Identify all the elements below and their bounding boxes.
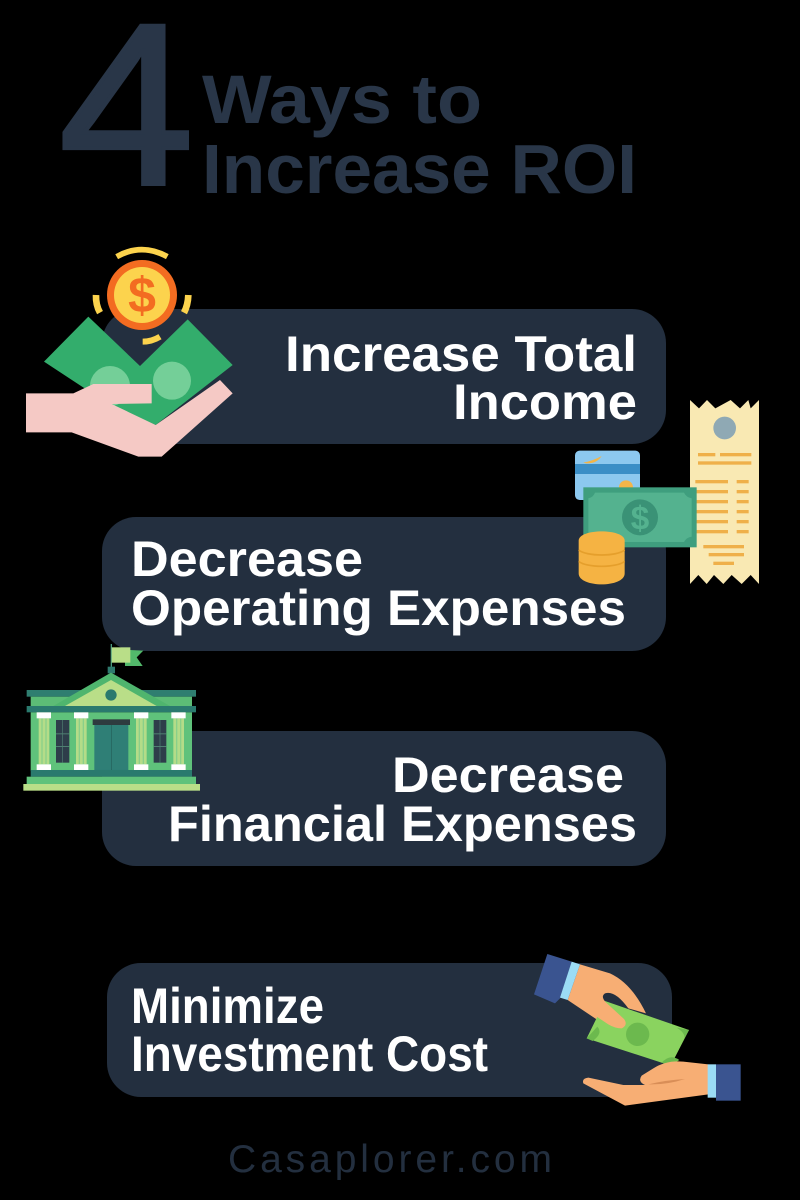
panel: minimize investment cost xyxy=(107,963,672,1097)
panel: increase total income xyxy=(102,309,666,444)
text: Decrease Operating Expenses: Decrease xyxy=(131,531,363,587)
panel: decrease financial expenses xyxy=(102,731,666,866)
text: Decrease Operating Expenses: Operating Expenses xyxy=(131,580,626,636)
panel: decrease operating expenses xyxy=(102,517,666,651)
text: Minimize Investment Cost xyxy=(131,978,488,1082)
title line: Increase ROI: Increase ROI xyxy=(202,130,637,208)
text: Decrease Operating Expenses xyxy=(131,531,626,636)
text: Decrease Financial Expenses xyxy=(168,747,637,852)
text: Decrease Financial Expenses: Financial Expenses xyxy=(168,796,637,852)
icon: hands exchanging cash xyxy=(534,954,741,1106)
icon: bank building xyxy=(23,644,200,791)
text: Increase Total Income: Increase Total xyxy=(285,326,637,382)
text: Minimize Investment Cost: Minimize xyxy=(131,978,324,1034)
text: Increase Total Income xyxy=(285,326,637,430)
icon: hand with money and coin: $ xyxy=(128,268,156,324)
icon: hand with money and coin xyxy=(26,250,233,457)
text: Decrease Financial Expenses: Decrease xyxy=(392,747,624,803)
icon: receipt, card, cash and coins: $ xyxy=(631,500,650,537)
text: Increase Total Income: Income xyxy=(453,374,637,430)
icon: receipt, card, cash and coins xyxy=(575,400,759,584)
footer: website: Casaplorer.com xyxy=(228,1138,552,1181)
title line: Ways to: Ways to xyxy=(202,61,482,138)
title xyxy=(59,0,637,233)
text: Minimize Investment Cost: Investment Cost xyxy=(131,1026,488,1082)
